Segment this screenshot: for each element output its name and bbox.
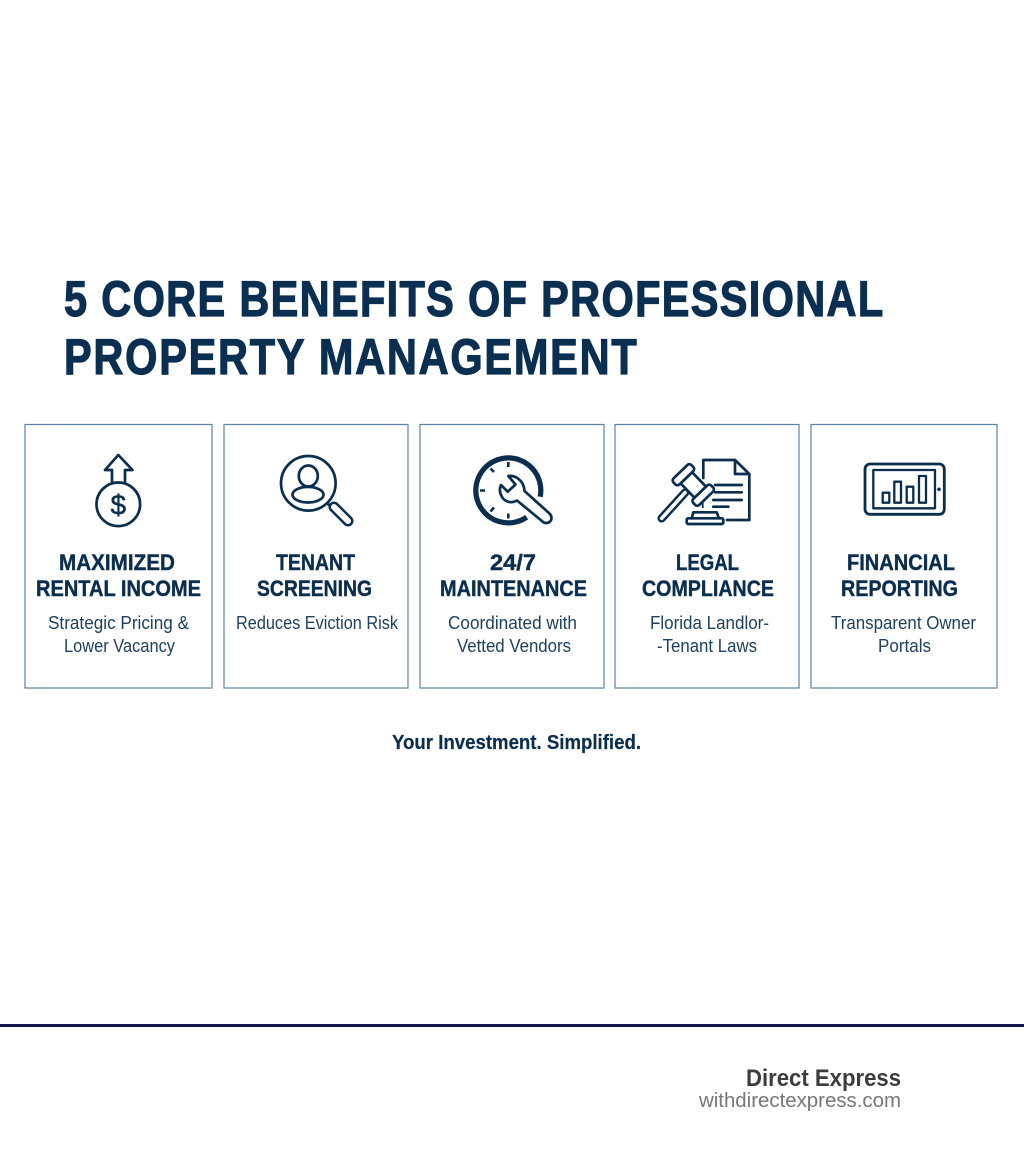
title: 5 CORE BENEFITS OF PROFESSIONAL (64, 270, 883, 327)
heading: tenant screening: SCREENING (257, 576, 372, 601)
heading: maximized rental income (36, 550, 201, 601)
footer brand: Direct Express (746, 1065, 901, 1092)
icon: clock with wrench (476, 458, 551, 523)
heading: tenant screening (257, 550, 372, 601)
heading: legal compliance (642, 550, 774, 601)
icon: money bag with up arrow (96, 455, 140, 526)
footer brand: withdirectexpress.com (698, 1089, 901, 1112)
panel: 24/7 maintenance (420, 424, 604, 688)
icon: tablet with bar chart (865, 464, 944, 514)
description: reduces eviction risk: Reduces Eviction Risk (236, 613, 399, 633)
heading: tenant screening: TENANT (276, 550, 355, 575)
description: transparent owner portals: Portals (878, 636, 931, 656)
tagline: Your Investment. Simplified. (392, 732, 641, 754)
heading: legal compliance: LEGAL (676, 550, 739, 575)
footer rule (0, 1024, 1024, 1027)
title: PROPERTY MANAGEMENT (64, 328, 637, 385)
description: florida landlord-tenant laws: Florida Landlor- (650, 613, 769, 633)
heading: 24/7 maintenance: 24/7 (490, 550, 536, 575)
description: coordinated with vetted vendors: Coordinated with (448, 613, 577, 633)
description: strategic pricing: Lower Vacancy (64, 636, 175, 656)
heading: legal compliance: COMPLIANCE (642, 576, 774, 601)
description: florida landlord-tenant laws (650, 613, 769, 656)
heading: financial reporting: REPORTING (841, 576, 958, 601)
heading: financial reporting: FINANCIAL (847, 550, 955, 575)
icon: magnifier with person (281, 456, 348, 521)
description: coordinated with vetted vendors (448, 613, 577, 656)
panel: tenant screening (224, 424, 408, 688)
title (64, 270, 883, 385)
heading: financial reporting (841, 550, 958, 601)
icon: gavel and document (662, 460, 749, 524)
heading: 24/7 maintenance (440, 550, 587, 601)
heading: maximized rental income: RENTAL INCOME (36, 576, 201, 601)
panel: financial reporting (811, 424, 997, 688)
description: transparent owner portals: Transparent Owner (831, 613, 976, 633)
description: coordinated with vetted vendors: Vetted Vendors (457, 636, 571, 656)
heading: maximized rental income: MAXIMIZED (59, 550, 175, 575)
heading: 24/7 maintenance: MAINTENANCE (440, 576, 587, 601)
footer brand (698, 1065, 901, 1112)
panel: legal compliance (615, 424, 799, 688)
icon: money bag with up arrow: $ (111, 490, 127, 520)
description: strategic pricing: Strategic Pricing & (48, 613, 189, 633)
description: strategic pricing (48, 613, 189, 656)
description: florida landlord-tenant laws: -Tenant Laws (657, 636, 757, 656)
panel: maximized rental income (25, 424, 212, 688)
description: transparent owner portals (831, 613, 976, 656)
